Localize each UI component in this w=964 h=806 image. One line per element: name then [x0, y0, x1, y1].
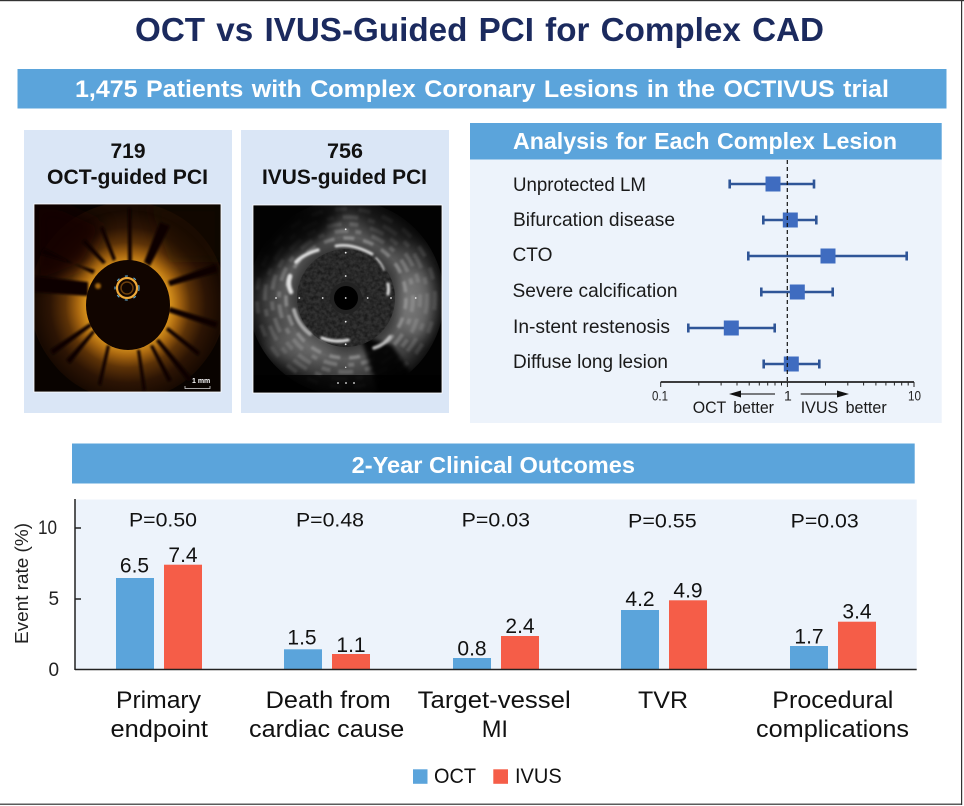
- banner: patients: [18, 69, 946, 108]
- lesion labels: In-stent restenosis: [513, 316, 670, 338]
- P values: P=0.03: [791, 510, 859, 532]
- arrow: OCT better: [693, 390, 775, 417]
- P values: P=0.48: [296, 510, 364, 532]
- category labels: [110, 687, 909, 743]
- P values: P=0.55: [628, 510, 697, 532]
- category labels: complications: [756, 716, 909, 743]
- confidence intervals: [688, 180, 907, 368]
- value labels: 4.2: [625, 588, 655, 611]
- value labels: 1.7: [794, 626, 824, 648]
- category labels: TVR: [638, 687, 688, 714]
- category labels: endpoint: [110, 716, 208, 743]
- value labels: 2.4: [505, 615, 535, 638]
- value labels: 3.4: [842, 600, 872, 624]
- scale bar: 1 mm: [192, 378, 210, 385]
- value labels: 1.5: [287, 626, 317, 650]
- bright stent ring: [289, 245, 390, 348]
- lesion labels: Bifurcation disease: [513, 209, 675, 231]
- point estimates: [724, 176, 836, 372]
- forest plot header: [470, 123, 942, 160]
- banner: clinical outcomes: [72, 444, 915, 484]
- OCT bars: [116, 578, 828, 670]
- value labels: 4.9: [673, 580, 703, 602]
- IVUS bars: [164, 565, 876, 670]
- calibration dots: [275, 228, 417, 384]
- banner: clinical outcomes: 2-Year Clinical Outcomes: [352, 452, 635, 478]
- category labels: Target-vessel: [418, 687, 571, 714]
- IVUS arm label: IVUS-guided PCI: [262, 165, 427, 189]
- log axis: 10: [908, 388, 921, 404]
- y axis: [12, 499, 81, 681]
- category labels: cardiac cause: [249, 716, 404, 743]
- OCT cross-section image: [30, 202, 226, 400]
- value labels: 0.8: [457, 638, 487, 660]
- panel: forest plot: [470, 123, 942, 423]
- legend: [413, 765, 562, 788]
- OCT patient count: 719: [110, 139, 146, 163]
- value labels: [120, 544, 872, 660]
- y axis: Event rate (%): [12, 523, 32, 644]
- value labels: 6.5: [120, 554, 149, 578]
- P values: P=0.03: [462, 510, 530, 532]
- legend: OCT: [434, 765, 476, 788]
- IVUS patient count: 756: [327, 139, 363, 163]
- log axis: [652, 382, 921, 404]
- scale bar: [185, 378, 210, 388]
- value labels: 1.1: [336, 634, 366, 657]
- y axis: 0: [48, 660, 59, 681]
- OCT arm label: OCT-guided PCI: [47, 165, 208, 189]
- P values: P=0.50: [129, 510, 197, 532]
- IVUS cross-section image: [248, 200, 444, 396]
- OCT catheter ring: [115, 276, 139, 300]
- log axis: 1: [784, 388, 792, 404]
- panel: IVUS-guided PCI: [241, 130, 449, 413]
- arrow: IVUS better: IVUS better: [801, 399, 887, 417]
- P values: [129, 510, 859, 532]
- y axis: 5: [48, 589, 59, 610]
- forest plot header: Analysis for Each Complex Lesion: [513, 128, 897, 154]
- value labels: 7.4: [168, 544, 198, 567]
- y axis: 10: [38, 518, 57, 539]
- lesion labels: CTO: [512, 244, 552, 266]
- lesion labels: Diffuse long lesion: [513, 351, 668, 373]
- log axis: 0.1: [652, 388, 668, 404]
- category labels: Primary: [116, 687, 201, 714]
- legend: IVUS: [515, 765, 562, 788]
- category labels: Procedural: [772, 687, 893, 714]
- arrow: IVUS better: [801, 390, 887, 417]
- title: OCT vs IVUS-Guided PCI for Complex CAD: [135, 11, 824, 48]
- banner: patients: 1,475 Patients with Complex Coronary Lesions in the OCTIVUS trial: [75, 76, 889, 103]
- arrow: OCT better: OCT better: [693, 399, 774, 417]
- lesion labels: Severe calcification: [512, 280, 678, 302]
- panel: OCT-guided PCI: [24, 130, 232, 413]
- lesion labels: Unprotected LM: [513, 174, 646, 196]
- bar chart: clinical outcomes: [12, 499, 917, 743]
- lesion labels: [512, 174, 678, 373]
- category labels: MI: [482, 716, 508, 743]
- category labels: Death from: [266, 687, 391, 714]
